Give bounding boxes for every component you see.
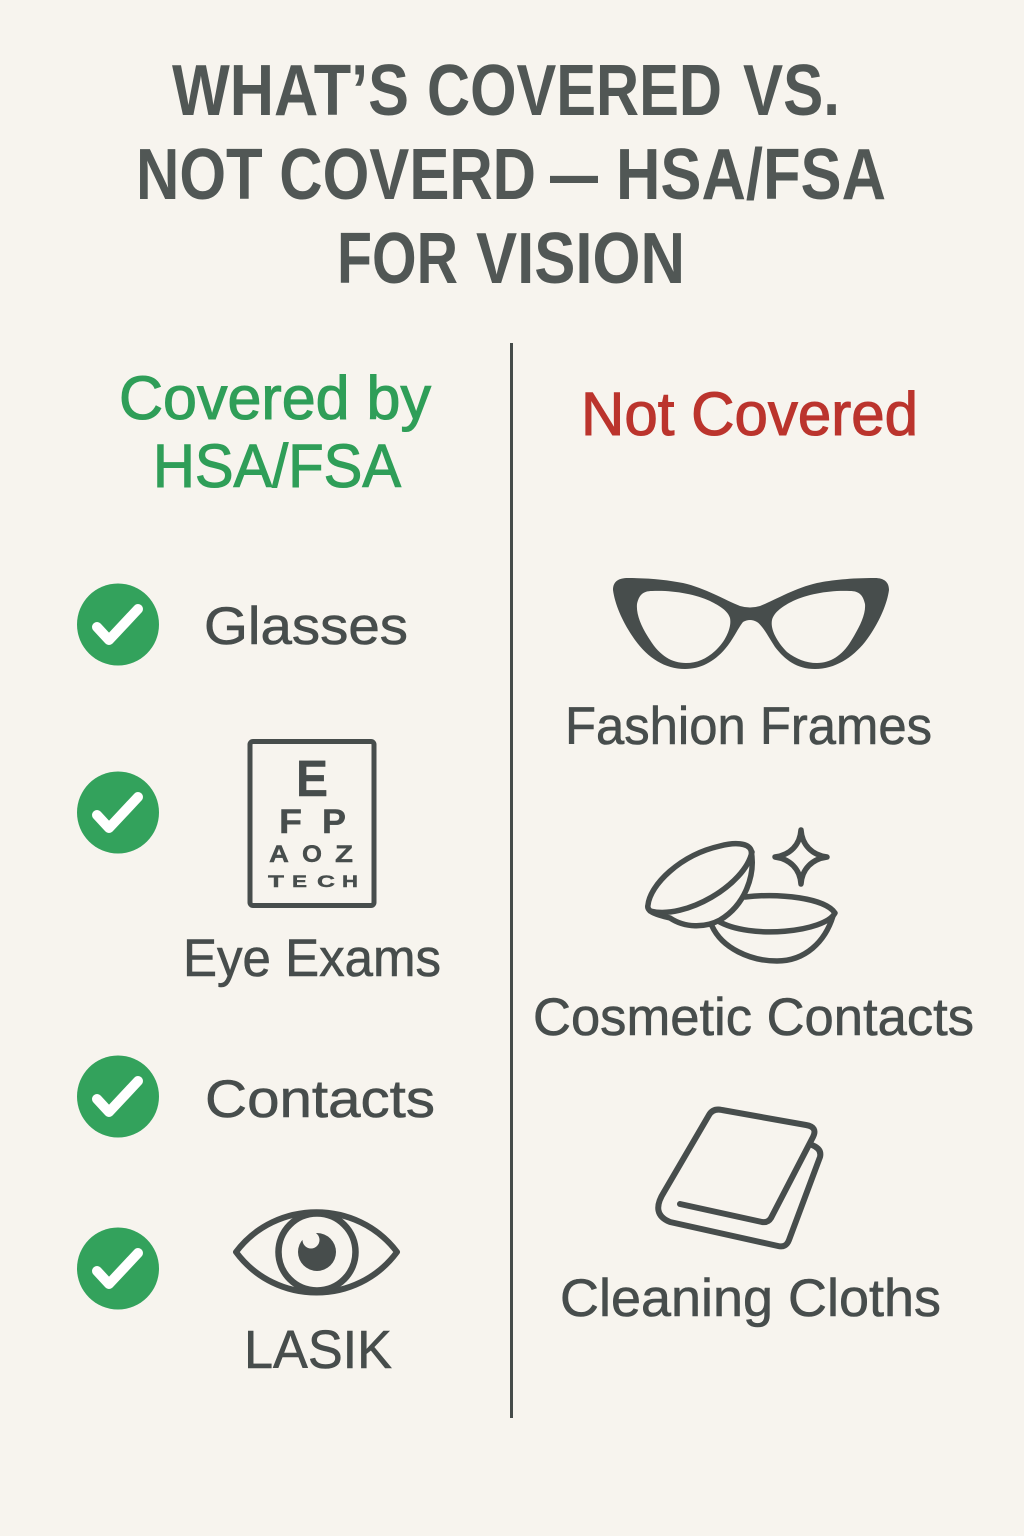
icon: check eye exams [77,772,159,854]
icon: eye chart [250,742,374,906]
heading: not covered: Not Covered [581,380,918,448]
icon: eye [236,1212,397,1292]
icon: eye chart: F [279,803,302,841]
title [136,51,886,299]
title: VS. [743,51,840,131]
item: cosmetic contacts [533,830,974,1047]
icon: eye chart: H [342,872,358,891]
title: FOR [337,219,458,299]
icon: check glasses [77,584,159,666]
icon: eye chart: C [317,872,335,891]
icon: check contacts [77,1056,159,1138]
heading: covered: HSA/FSA [153,432,401,500]
title: COVERED [427,51,722,131]
icon: eye chart: A [269,841,289,868]
item: glasses [77,584,408,666]
label: cleaning cloths: Cleaning Cloths [560,1269,941,1328]
heading: covered: Covered by [119,364,431,432]
title: HSA/FSA [616,135,886,215]
item: contacts [77,1056,435,1138]
icon: eye chart: O [302,841,322,868]
icon: check lasik [77,1228,159,1310]
item: lasik [77,1212,397,1380]
label: lasik: LASIK [244,1320,392,1380]
icon: eye chart: E [296,750,328,807]
icon: eye chart: E [292,872,307,891]
item: eye exams [77,742,441,988]
heading: covered [119,364,431,500]
title: NOT COVERD [136,135,536,215]
item: fashion frames [565,578,932,756]
label: glasses: Glasses [204,597,408,656]
title: — [550,135,598,215]
label: fashion frames: Fashion Frames [565,697,932,756]
label: eye exams: Eye Exams [183,929,441,988]
icon: eye chart: T [268,872,285,891]
center divider [510,343,513,1418]
item: cleaning cloths [560,1110,941,1328]
icon: eye chart: Z [335,841,353,868]
title: VISION [476,219,685,299]
label: contacts: Contacts [205,1070,435,1129]
icon: cat-eye glasses [613,578,889,669]
icon: contact lenses and sparkle [648,830,835,961]
icon: folded cloth [658,1110,820,1246]
label: cosmetic contacts: Cosmetic Contacts [533,988,974,1047]
icon: eye chart: P [322,803,346,841]
title: WHAT’S [172,51,409,131]
